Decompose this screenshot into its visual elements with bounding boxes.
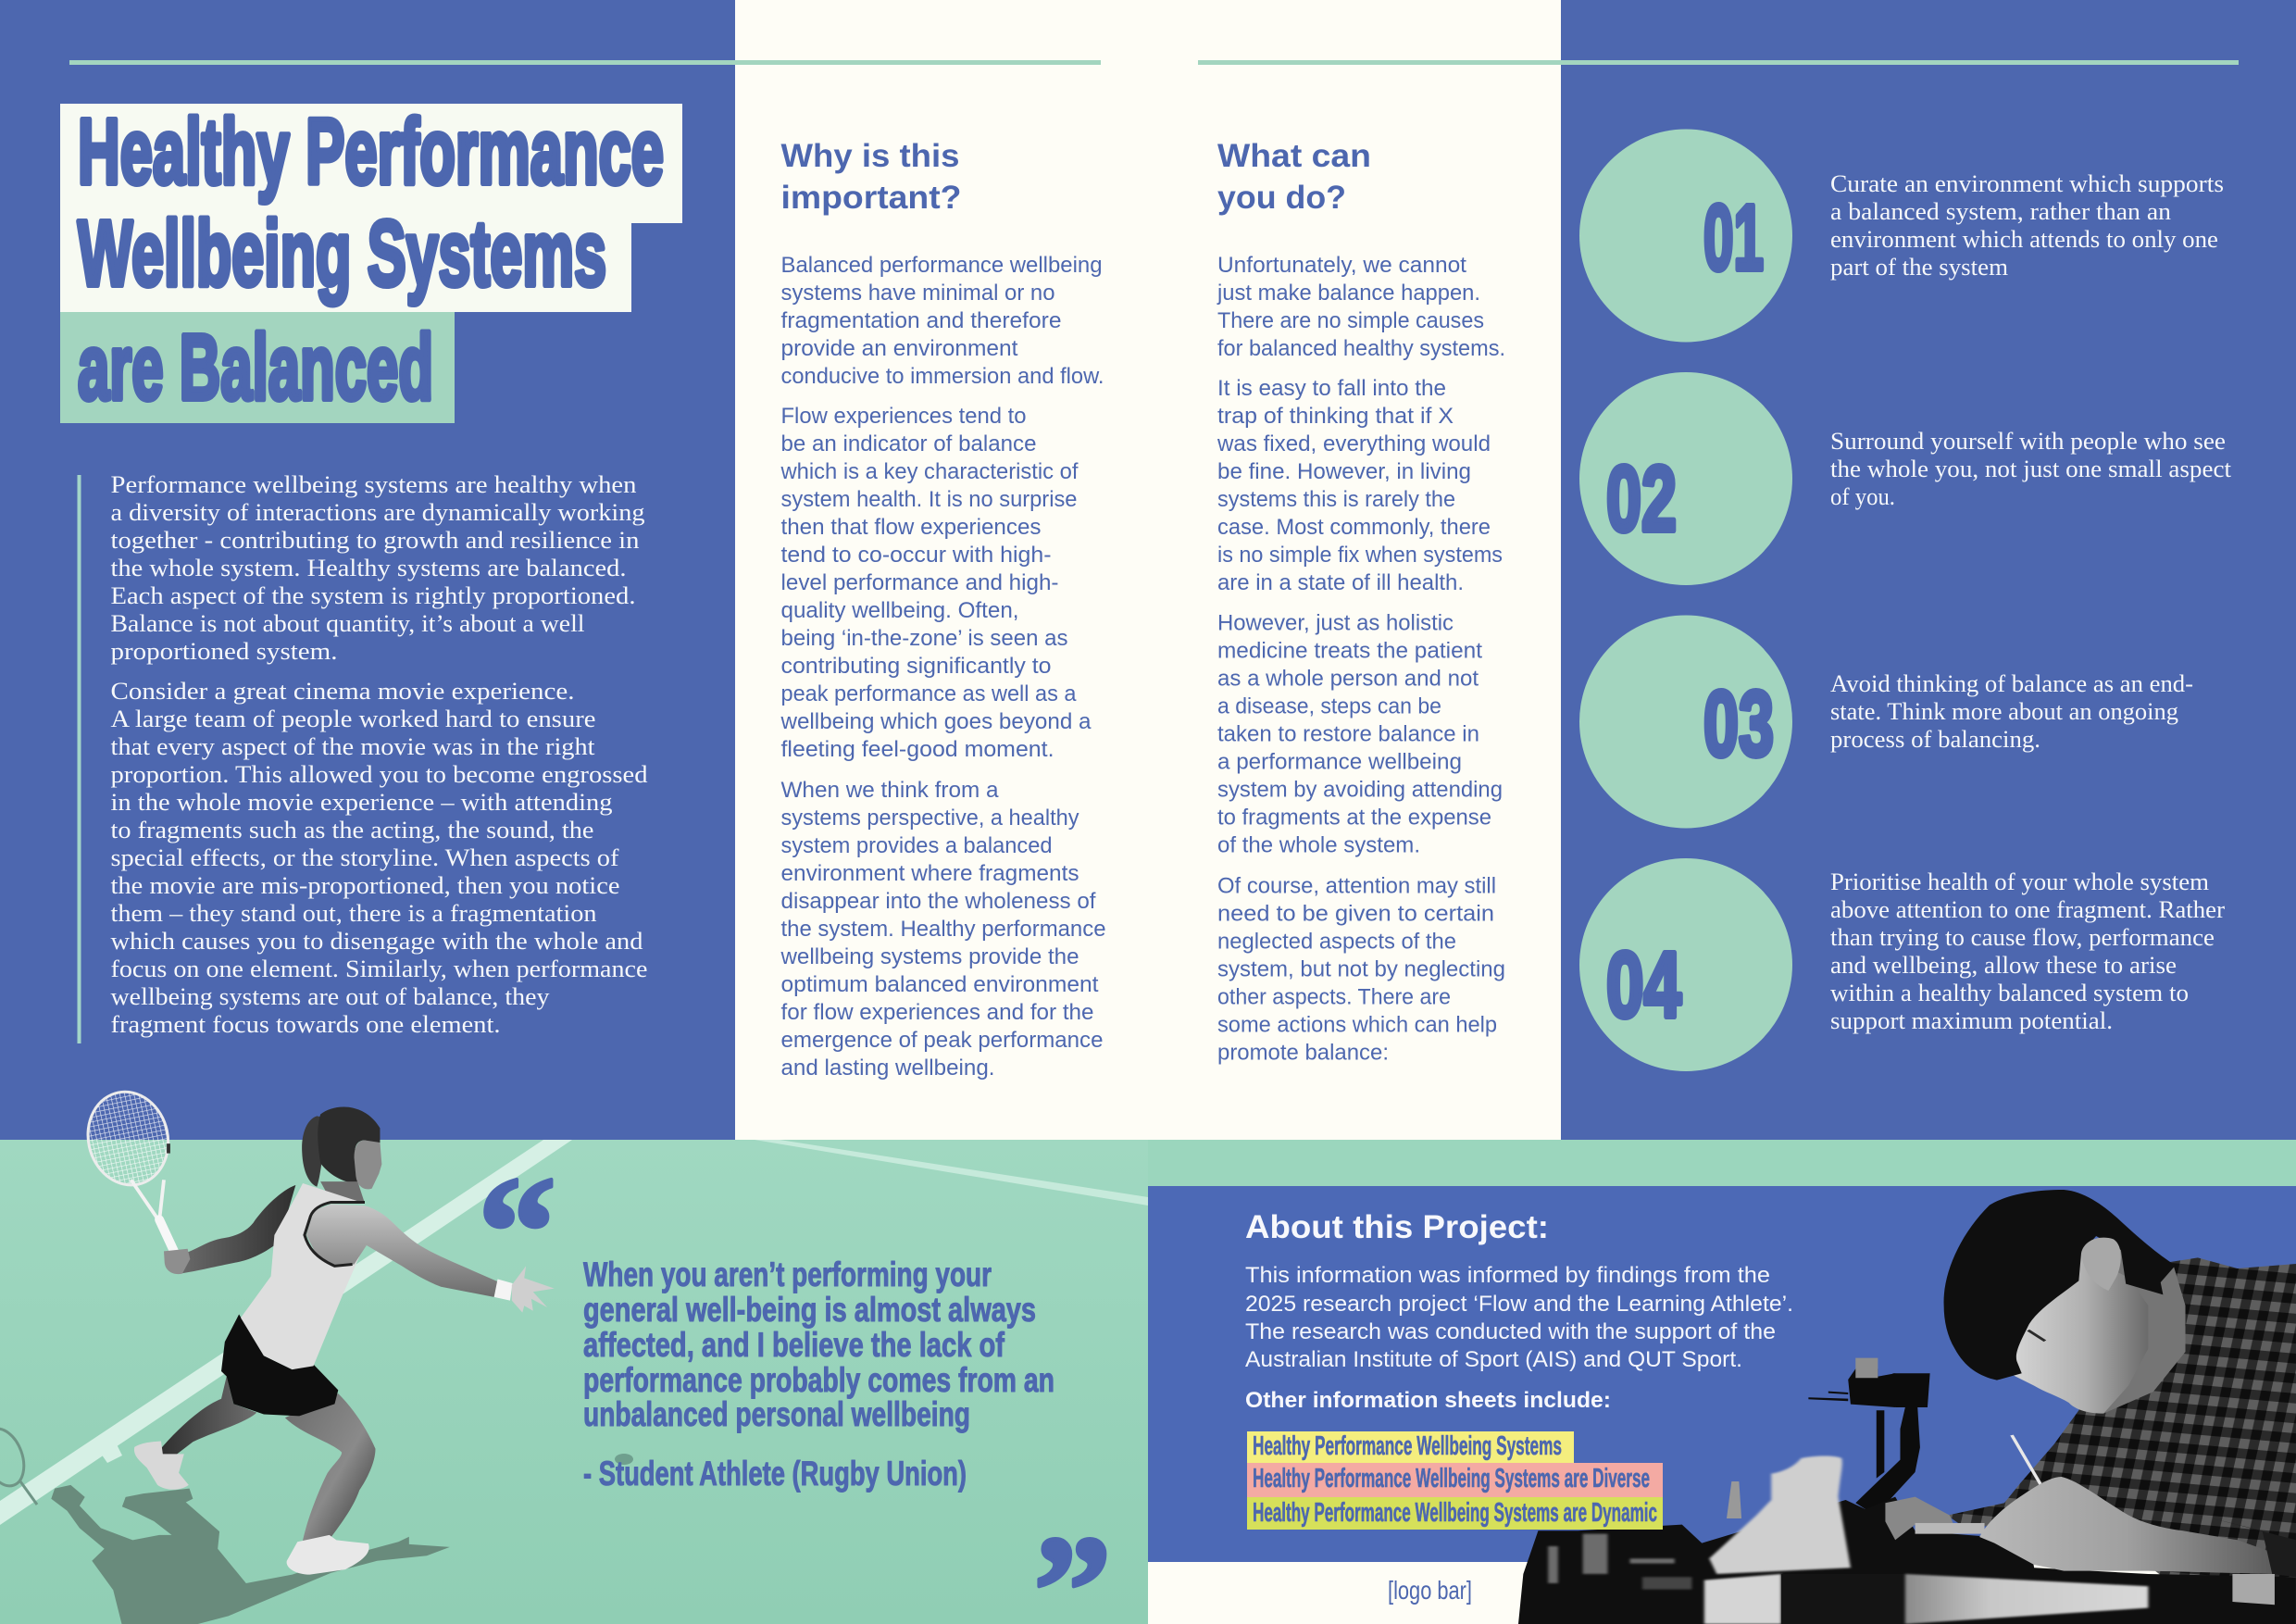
text block: why body: Flow experiences tend to [781,404,1026,429]
black base of machine [1518,1497,2296,1624]
text block: what body: systems this is rarely the [1217,487,1455,512]
callout: quote text: affected, and I believe the lack of [583,1326,1005,1364]
title line 1: Healthy Performance [78,100,664,204]
foreground cylinder dark [1781,1574,1905,1624]
white machine block [1709,1455,1851,1574]
title line 3: are Balanced [78,316,433,419]
text block: what body: is no simple fix when systems [1217,543,1503,568]
logo bar placeholder: [logo bar] [1388,1576,1472,1605]
back shoe [134,1442,189,1490]
text block: why body: Balanced performance wellbeing [781,253,1102,278]
player shadow [51,1485,450,1624]
panel: what can you do [1217,138,1505,1065]
action 04 [1579,858,2225,1071]
text block: introduction: together - contributing to growth and resilience in [111,527,639,554]
racket shadow [0,1423,37,1505]
text block: introduction: proportion. This allowed you to become engrossed [111,761,648,788]
text block: introduction: which causes you to disengage with the whole and [111,928,643,955]
ball shadow [615,1454,633,1465]
sheet tag yellow [1247,1431,1574,1463]
text block: introduction: Balance is not about quantity, it’s about a well [111,610,585,637]
about text [1245,1209,1793,1413]
text block: why body: be an indicator of balance [781,431,1037,456]
text block: why body: for flow experiences and for the [781,1000,1094,1025]
text block: what body: as a whole person and not [1217,667,1479,691]
text block: what body: a disease, steps can be [1217,694,1441,718]
sleeve [2213,1518,2296,1577]
back leg [159,1377,256,1461]
text block: why body: conducive to immersion and flow. [781,364,1104,389]
text block: why body: systems perspective, a healthy [781,806,1079,831]
court line left [0,1140,572,1525]
text block: why body: systems have minimal or no [781,281,1055,306]
text block: what body: was fixed, everything would [1217,431,1491,456]
shorts [221,1315,338,1416]
neck [320,1181,365,1204]
title background line 1 [60,104,682,223]
hair [318,1107,380,1184]
text block: why body: being ‘in-the-zone’ is seen as [781,626,1068,651]
heading: why is this important [781,138,961,216]
about paragraph [1245,1263,1793,1372]
foreground white block [1704,1574,1781,1624]
text block: what body: a performance wellbeing [1217,750,1462,774]
front leg [285,1393,375,1552]
text block: why body: peak performance as well as a [781,681,1077,706]
text: action 01 [1830,170,2224,281]
text: action 04: than trying to cause flow, performance [1830,924,2215,951]
text block: introduction: special effects, or the storyline. When aspects of [111,844,619,871]
text block: why body: optimum balanced environment [781,972,1099,997]
text block: why body: tend to co-occur with high- [781,543,1052,568]
robot arm [1808,1358,1930,1516]
text block: introduction: Consider a great cinema movie experience. [111,678,574,705]
circle 01 [1579,130,1792,343]
rear arm [181,1185,295,1274]
eye [2028,1330,2045,1341]
foreground cylinder light [1905,1574,2148,1624]
text block: why body: then that flow experiences [781,515,1041,540]
text block: why body: which is a key characteristic of [780,459,1079,484]
top rule right [1198,60,2239,65]
illustration: student with robot arm [1518,1190,2296,1624]
panel: about background [1148,1186,2296,1562]
quote attribution: - Student Athlete (Rugby Union) [583,1455,967,1493]
about paragraph: This information was informed by findings from the [1245,1263,1770,1288]
text block: introduction: the movie are mis-proportioned, then you notice [111,872,620,899]
circle 04 [1579,858,1792,1071]
text: action 04: within a healthy balanced system to [1830,980,2189,1006]
text: action 04 [1830,868,2225,1034]
number 01: 01 [1703,186,1764,290]
action 01 [1579,130,2224,343]
wristband [494,1280,513,1301]
about paragraph: Australian Institute of Sport (AIS) and QUT Sport. [1245,1347,1742,1372]
callout: quote text: unbalanced personal wellbeing [583,1395,970,1433]
text block: what body: some actions which can help [1217,1013,1497,1037]
text block: introduction: A large team of people worked hard to ensure [111,706,596,732]
text block: why body: system health. It is no surprise [781,487,1078,512]
heading: what can you do: you do? [1217,180,1346,216]
text block: why body: the system. Healthy performance [781,917,1105,942]
sheet tag lime: Healthy Performance Wellbeing Systems are Dynamic [1253,1498,1657,1528]
text: action 01: part of the system [1830,254,2008,281]
action 03 [1579,615,2193,828]
text block: introduction [111,471,648,1038]
about paragraph: 2025 research project ‘Flow and the Learning Athlete’. [1245,1292,1793,1317]
text block: why body: provide an environment [781,336,1018,361]
heading: what can you do: What can [1217,138,1371,174]
face [2007,1253,2148,1414]
text block: what body: Unfortunately, we cannot [1217,253,1466,278]
sheet tag yellow: Healthy Performance Wellbeing Systems [1253,1431,1562,1461]
text block: what body: to fragments at the expense [1217,806,1491,830]
list of other sheets [1247,1431,1663,1530]
text block: introduction: focus on one element. Similarly, when performance [111,956,648,982]
text block: why body: contributing significantly to [781,654,1052,679]
text block: what body: It is easy to fall into the [1217,376,1446,401]
text block: what body: Of course, attention may still [1217,874,1496,898]
callout: quote text [583,1255,1054,1433]
left hand [1885,1497,1954,1540]
text block: why body: emergence of peak performance [781,1028,1104,1053]
illustration: tennis player [51,1084,555,1624]
callout: quote text: general well-being is almost always [583,1291,1036,1329]
text: action 02: Surround yourself with people who see [1830,428,2226,455]
text: action 01: a balanced system, rather than an [1830,198,2171,225]
other sheets heading: Other information sheets include: [1245,1388,1611,1413]
text block: why body: system provides a balanced [781,833,1052,858]
text: action 03: process of balancing. [1830,726,2040,753]
tank top [241,1183,365,1369]
court line right [755,1140,1148,1206]
text block: what body: are in a state of ill health. [1217,570,1464,595]
text: action 04: Prioritise health of your whole system [1830,868,2209,895]
text block: what body: trap of thinking that if X [1217,404,1454,429]
text: action 01: Curate an environment which supports [1830,170,2224,197]
tank armhole [305,1202,365,1266]
right hand [1979,1477,2272,1574]
text block: what body: just make balance happen. [1217,281,1480,306]
text: action 02: of you. [1830,483,1895,510]
text block: introduction: to fragments such as the acting, the sound, the [111,817,594,843]
text block: what body: taken to restore balance in [1217,722,1479,746]
title block [60,100,682,423]
text: action 04: support maximum potential. [1830,1007,2113,1034]
text block: why body: environment where fragments [781,861,1079,886]
about paragraph: The research was conducted with the support of the [1245,1319,1776,1344]
text block: what body [1217,253,1505,1065]
back and front arm [306,1204,498,1297]
text block: what body: need to be given to certain [1217,902,1494,926]
text block: what body: system, but not by neglecting [1217,957,1505,981]
top rule left [69,60,1101,65]
title line 2: Wellbeing Systems [78,202,606,306]
grey machine details [1548,1534,1691,1590]
text: action 02: the whole you, not just one small aspect [1830,456,2232,482]
circuit board [1915,1523,1985,1534]
text block: what body: other aspects. There are [1217,985,1451,1009]
pen [2012,1435,2041,1486]
callout: quote text: performance probably comes from an [583,1361,1054,1399]
text block: introduction: that every aspect of the movie was in the right [111,733,595,760]
text block: why body [780,253,1105,1081]
bracket [2232,1574,2275,1605]
text block: why body: fleeting feel-good moment. [781,737,1054,762]
hair [1944,1190,2176,1380]
text block: why body: wellbeing which goes beyond a [780,709,1092,734]
court line tick [101,1444,122,1463]
icon: opening quote mark: “ [478,1144,556,1318]
text: action 04: above attention to one fragment. Rather [1830,896,2225,923]
ear [2081,1238,2121,1291]
panel: quote court background [0,1140,1148,1624]
text block: what body: of the whole system. [1217,833,1420,857]
racket [80,1084,177,1252]
text block: what body: neglected aspects of the [1217,930,1456,954]
text block: introduction: the whole system. Healthy systems are balanced. [111,555,626,581]
panel: centre cream column [735,0,1561,1140]
heading: why is this important: Why is this [781,138,959,174]
sheet tag pink [1247,1463,1663,1497]
text block: what body: be fine. However, in living [1217,459,1471,484]
text block: why body: fragmentation and therefore [781,308,1061,333]
neck [2089,1238,2186,1414]
panel: logo background [1148,1562,2296,1624]
text block: introduction: Each aspect of the system is rightly proportioned. [111,582,635,609]
text block: introduction: them – they stand out, there is a fragmentation [111,900,596,927]
text: action 03: Avoid thinking of balance as an end- [1830,670,2193,697]
text: action 03: state. Think more about an ongoing [1830,698,2178,725]
face [355,1140,381,1189]
plaid shirt [1947,1257,2296,1577]
circle 03 [1579,615,1792,828]
about heading: About this Project: [1245,1209,1549,1245]
text block: why body: When we think from a [781,778,999,803]
text block: what body: However, just as holistic [1217,611,1454,635]
text: action 04: and wellbeing, allow these to arise [1830,952,2177,979]
text block: what body: system by avoiding attending [1217,778,1503,802]
text block: what body: case. Most commonly, there [1217,515,1491,540]
heading: what can you do [1217,138,1371,216]
text block: introduction: Performance wellbeing systems are healthy when [111,471,637,498]
sheet tag pink: Healthy Performance Wellbeing Systems are Diverse [1253,1464,1650,1493]
text block: why body: and lasting wellbeing. [781,1056,994,1081]
text block: why body: disappear into the wholeness of [781,889,1096,914]
text: action 03 [1830,670,2193,753]
number 04: 04 [1606,933,1681,1037]
text block: introduction: in the whole movie experience – with attending [111,789,613,816]
text block: introduction: a diversity of interactions are dynamically working [111,499,644,526]
title background line 3 [60,312,455,423]
title background line 2 [60,223,631,312]
text: action 02 [1830,428,2232,510]
text block: why body: level performance and high- [781,570,1059,595]
ponytail [302,1116,325,1187]
number 02: 02 [1606,447,1677,551]
panel: about strip mint [1148,1140,2296,1186]
callout: quote text: When you aren’t performing your [583,1255,992,1293]
text: action 01: environment which attends to only one [1830,226,2218,253]
text block: why body: wellbeing systems provide the [780,944,1079,969]
text block: what body: for balanced healthy systems. [1217,336,1505,361]
circle 02 [1579,372,1792,585]
sheet tag lime [1247,1497,1663,1530]
hand on racket [164,1249,190,1274]
intro rule [78,475,81,1043]
number 03: 03 [1703,672,1774,776]
text block: introduction: proportioned system. [111,638,337,665]
text block: why body: quality wellbeing. Often, [781,598,1018,623]
front shoe [287,1535,369,1575]
action 02 [1579,372,2232,585]
text block: what body: medicine treats the patient [1217,639,1482,663]
panel: why is this important [780,138,1105,1081]
heading: why is this important: important? [781,180,961,216]
text block: introduction: wellbeing systems are out of balance, they [111,983,550,1010]
text block: introduction: fragment focus towards one element. [111,1011,500,1038]
text block: what body: There are no simple causes [1217,308,1484,333]
open hand [512,1266,555,1313]
text block: what body: promote balance: [1217,1041,1389,1065]
small post [1727,1481,1741,1518]
